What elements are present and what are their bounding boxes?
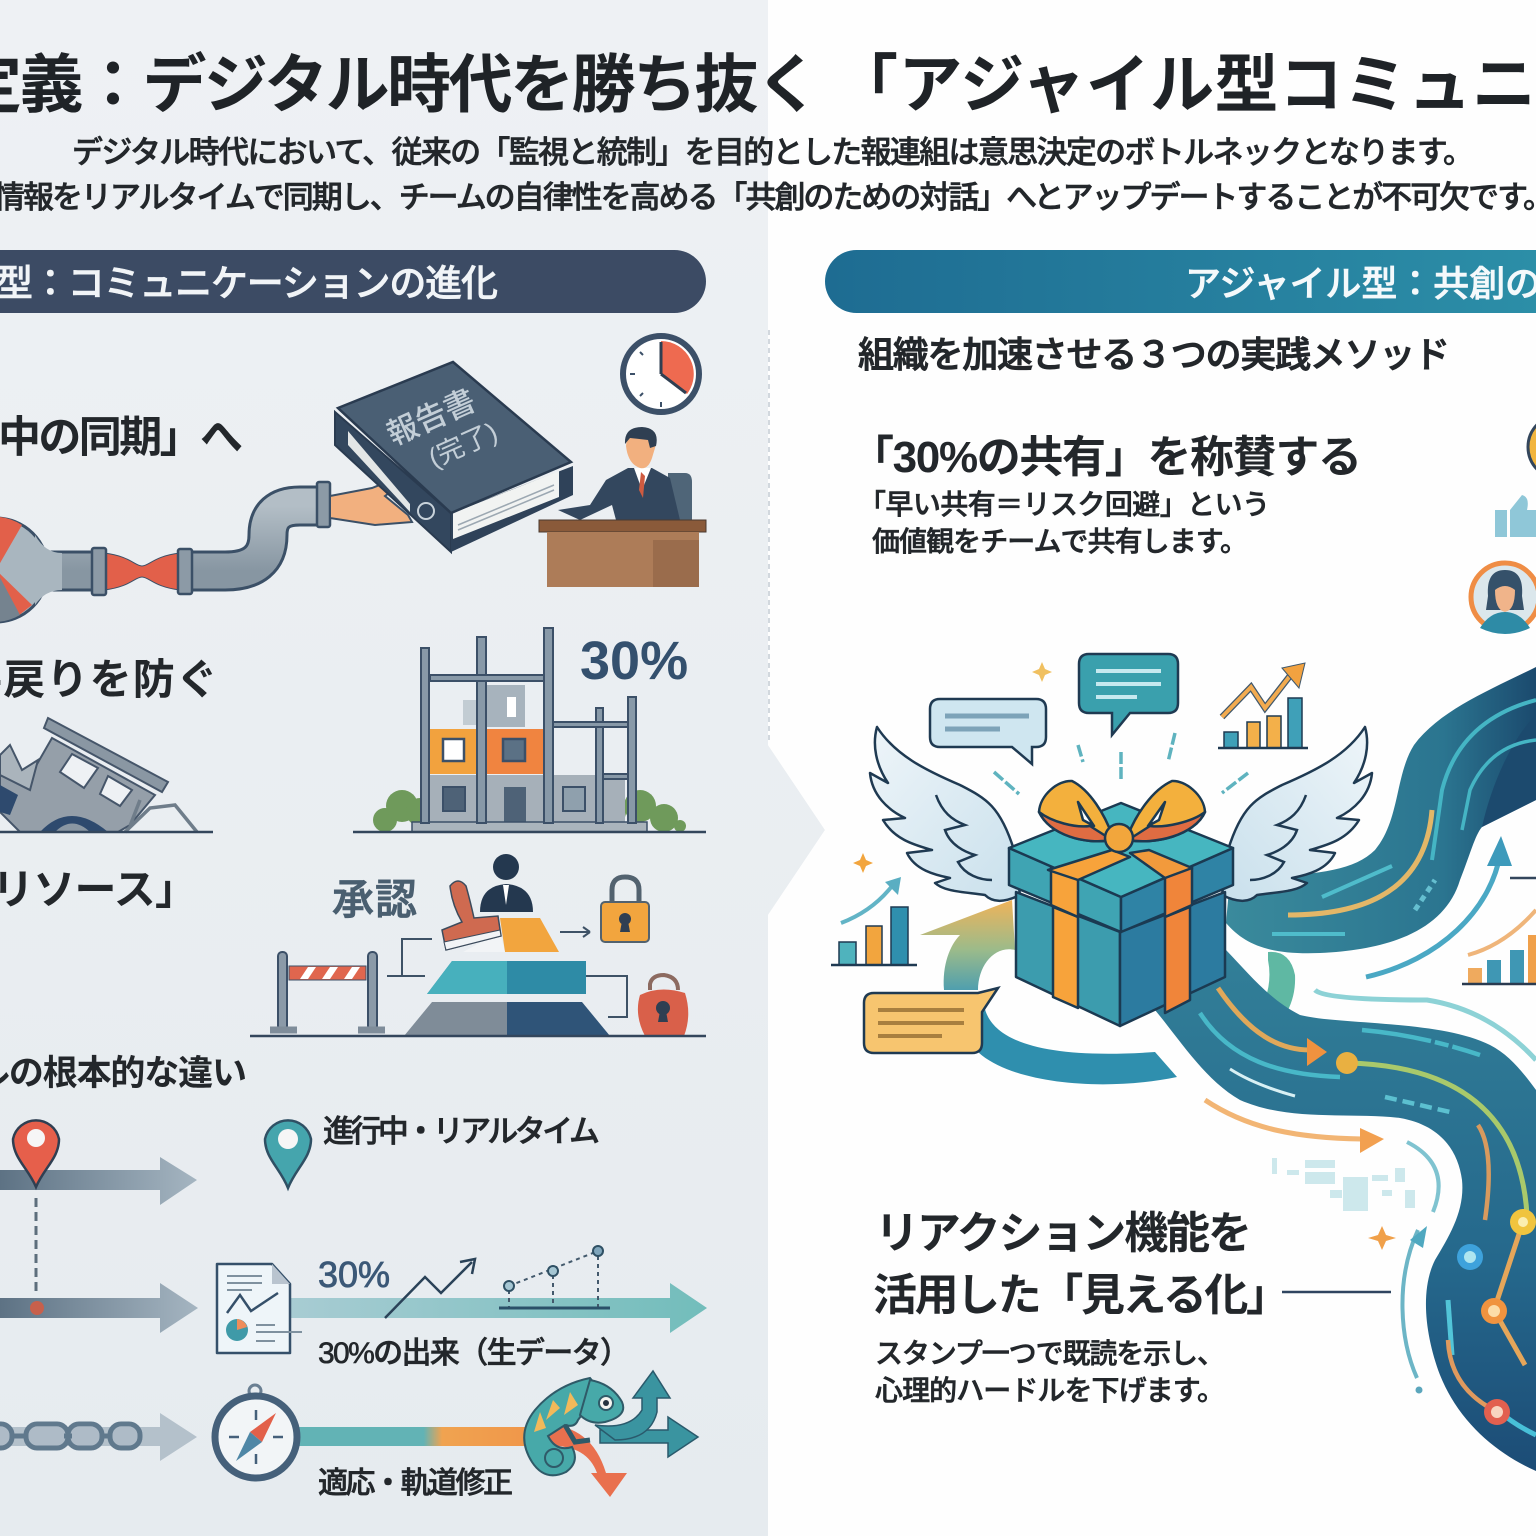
arrow: agile row 2 <box>288 1283 707 1333</box>
label: 30%: 30% <box>580 631 688 691</box>
icon: gift wings <box>870 727 1372 901</box>
icon: approval hierarchy <box>387 854 627 1036</box>
icon: chart top <box>1218 663 1308 748</box>
icon: red lock <box>638 975 688 1036</box>
label: approval: 承認 <box>332 876 417 923</box>
label: 30% small: 30% <box>318 1254 390 1295</box>
icon: avatar <box>1471 563 1536 634</box>
arrow: blue rising <box>1366 836 1536 977</box>
method 2 text: 心理的ハードルを下げます。 <box>875 1375 1225 1406</box>
arrow: traditional row 1 <box>0 1157 197 1205</box>
icon: bottleneck pipe <box>0 482 330 622</box>
icon: yellow speech bubble <box>864 988 998 1053</box>
heading pill: traditional: 型：コミュニケーションの進化 <box>0 263 498 304</box>
connector line <box>1282 1291 1391 1293</box>
intro text <box>0 135 1536 215</box>
heading pill: agile <box>825 250 1536 313</box>
divider dashes <box>768 330 770 740</box>
method 2 text: 活用した「見える化」 <box>873 1271 1290 1320</box>
heading: three methods: 組織を加速させる３つの実践メソッド <box>858 334 1450 375</box>
arcs and sparkle near flow <box>1368 1142 1439 1394</box>
icon: document <box>217 1264 302 1353</box>
icon: report book: 報告書 <box>382 383 481 452</box>
title: 「アジャイル型コミュニ <box>834 49 1536 121</box>
intro text: デジタル時代において、従来の「監視と統制」を目的とした報連組は意思決定のボトルネックとなります。 <box>72 135 1474 170</box>
method 1 text: 価値観をチームで共有します。 <box>872 526 1248 557</box>
icon: red pin <box>13 1120 59 1187</box>
sparkle bursts <box>853 662 1248 873</box>
panel: agile background <box>768 0 1536 1536</box>
icon: chameleon <box>524 1378 623 1475</box>
intro text: 情報をリアルタイムで同期し、チームの自律性を高める「共創のための対話」へとアップデートすることが不可欠です。 <box>0 180 1536 215</box>
icon: collapsed building <box>0 718 213 832</box>
arrow: return ring <box>920 900 1177 1084</box>
heading pill: traditional <box>0 250 706 313</box>
arrow: pale teal <box>1315 990 1536 1060</box>
section heading: sync: 中の同期」へ <box>0 414 243 462</box>
arrow: chain <box>0 1413 197 1461</box>
icon: bow <box>1039 781 1205 852</box>
method 1 text: 「30%の共有」を称賛する <box>850 433 1362 482</box>
faded pixel cluster <box>1272 1158 1415 1211</box>
method 2 text: リアクション機能を <box>875 1209 1252 1258</box>
icon: thumbs up <box>1495 495 1536 537</box>
method 2 text <box>873 1209 1290 1406</box>
icon: report book: (完了) <box>424 417 502 473</box>
icon: manager at desk <box>539 427 706 587</box>
icon: orange lock <box>601 877 649 942</box>
icon: rising trend <box>385 1246 610 1318</box>
icon: light speech bubble <box>930 699 1046 764</box>
icon: hand <box>330 480 412 525</box>
label: in progress: 進行中・リアルタイム <box>323 1114 600 1149</box>
icon: gift box <box>1009 803 1233 1026</box>
green link curve <box>1265 952 1295 1012</box>
label: adaptive correction: 適応・軌道修正 <box>318 1467 513 1500</box>
title <box>0 49 1536 121</box>
method 2 text: スタンプ一つで既読を示し、 <box>875 1338 1225 1369</box>
arrow: adaptive bar <box>296 1427 528 1446</box>
flow ribbon: lower <box>1155 950 1536 1471</box>
icon: compass <box>215 1385 297 1478</box>
icon: gold medal partial <box>1528 415 1536 479</box>
method 1 text <box>850 433 1362 557</box>
icon: teal speech bubble <box>1079 654 1178 735</box>
arrow: pale orange <box>1205 1100 1384 1153</box>
icon: barrier <box>270 952 385 1030</box>
icon: clock <box>623 336 699 412</box>
icon: 30% building under construction <box>353 628 706 832</box>
method 1 text: 「早い共有＝リスク回避」という <box>858 489 1270 520</box>
flow ribbon: upper <box>1226 667 1536 953</box>
icon: branching arrows <box>535 1371 698 1497</box>
label: 30% raw data: 30%の出来（生データ） <box>318 1337 630 1370</box>
dashed timeline link <box>34 1198 38 1295</box>
arrow: traditional row 2 <box>0 1283 198 1333</box>
icon: partial chart right <box>1462 910 1536 984</box>
icon: teal pin <box>265 1120 311 1188</box>
panel: traditional background <box>0 0 825 1536</box>
heading pill: agile: アジャイル型：共創の <box>1185 263 1536 304</box>
icon: report book <box>335 362 573 552</box>
ground line: approval <box>250 1035 706 1037</box>
icon: chart left <box>831 877 917 965</box>
